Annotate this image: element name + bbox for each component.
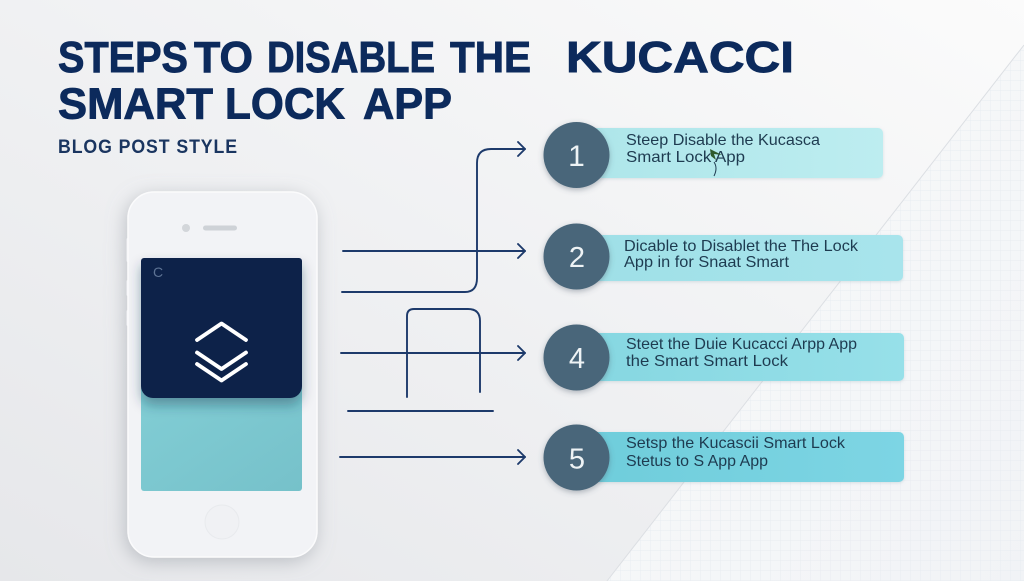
title: TO [194, 33, 253, 82]
step 1 text [626, 132, 820, 166]
leaf artefact [710, 149, 722, 176]
step 5 number: 5 [569, 444, 585, 476]
step 1 text: Smart Lock App [626, 149, 745, 166]
step 2 [544, 224, 903, 290]
step 5 badge [544, 424, 610, 490]
step 1 [544, 122, 883, 188]
title: THE [450, 33, 531, 82]
connector arrows [340, 142, 525, 464]
step 1 bar [590, 128, 883, 178]
step 5 text [626, 435, 846, 470]
step 5 [544, 424, 904, 490]
home button [205, 505, 239, 539]
step 2 bar [590, 235, 903, 281]
step 4 text [626, 336, 857, 370]
step 2 badge [544, 224, 610, 290]
navy app card: C [153, 264, 163, 280]
step 5 text: Setsp the Kucascii Smart Lock [626, 435, 846, 452]
step 4 bar [590, 333, 904, 381]
plain line [348, 410, 493, 412]
phone body [126, 192, 317, 557]
step 4 text: the Smart Smart Lock [626, 353, 789, 370]
icon: stacked layers [197, 324, 246, 380]
step 4 text: Steet the Duie Kucacci Arpp App [626, 336, 857, 353]
arrow to step 1 [342, 142, 525, 292]
arrow to step 5 [340, 450, 525, 464]
navy app card [141, 258, 302, 398]
step 2 text: Dicable to Disablet the The Lock [624, 238, 859, 255]
camera and speaker [182, 224, 237, 232]
arrow to step 4 [341, 346, 525, 360]
step 1 badge [544, 122, 610, 188]
arch connector [407, 309, 480, 397]
step 4 badge [544, 324, 610, 390]
teal screen panel [141, 380, 302, 491]
step 4 [544, 324, 904, 390]
title: LOCK [225, 80, 345, 128]
step 1 number: 1 [568, 140, 585, 173]
step 2 number: 2 [569, 242, 585, 274]
step 4 number: 4 [569, 343, 585, 375]
step 1 text: Steep Disable the Kucasca [626, 132, 820, 149]
title [58, 33, 794, 128]
arrow to step 2 [343, 244, 525, 258]
phone illustration [126, 192, 317, 557]
title: STEPS [58, 33, 188, 82]
title: DISABLE [267, 33, 435, 82]
step 5 bar [590, 432, 904, 482]
subtitle: BLOG POST STYLE [58, 136, 238, 158]
step 2 text [624, 238, 859, 271]
step 5 text: Stetus to S App App [626, 453, 768, 470]
title: SMART [58, 80, 213, 128]
step 2 text: App in for Snaat Smart [624, 254, 790, 271]
title: APP [363, 80, 452, 128]
title: KUCACCI [566, 33, 794, 82]
